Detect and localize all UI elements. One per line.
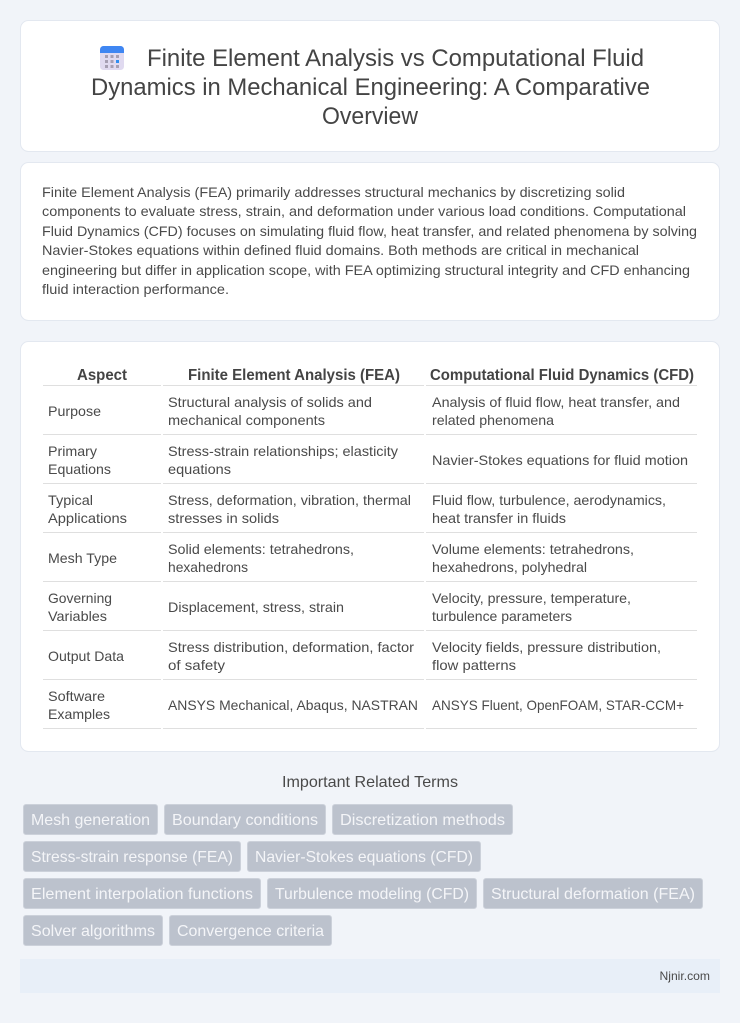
tags: related terms: Navier-Stokes equations (CFD) xyxy=(255,849,473,866)
row: software examples xyxy=(48,688,684,722)
row: typical applications: Fluid flow, turbulence, aerodynamics, xyxy=(432,492,666,508)
row: governing variables xyxy=(48,590,631,624)
row: mesh type xyxy=(48,541,634,575)
row: software examples: ANSYS Mechanical, Abaqus, NASTRAN xyxy=(168,697,418,713)
tags: related terms xyxy=(24,804,702,946)
tags: related terms: Mesh generation xyxy=(31,812,150,829)
row: mesh type: hexahedrons xyxy=(168,559,248,575)
row: primary equations: Equations xyxy=(48,461,111,477)
row: typical applications: stresses in solids xyxy=(168,510,279,526)
row: typical applications: Typical xyxy=(48,492,93,508)
intro text: Finite Element Analysis (FEA) primarily addresses structural mechanics by discretizing solid xyxy=(42,184,625,200)
row: primary equations: equations xyxy=(168,461,231,477)
intro text: Navier-Stokes equations within defined fluid domains. Both methods are critical in mechanical xyxy=(42,242,639,258)
row: governing variables: Governing xyxy=(48,590,112,606)
tags: related terms: Structural deformation (FEA) xyxy=(491,886,695,903)
row: governing variables: Displacement, stress, strain xyxy=(168,599,344,615)
row: output data: Stress distribution, deformation, factor xyxy=(168,639,414,655)
intro text xyxy=(42,184,697,297)
tags: related terms: Turbulence modeling (CFD) xyxy=(275,886,469,903)
row: purpose xyxy=(48,394,680,428)
row: mesh type: hexahedrons, polyhedral xyxy=(432,559,587,575)
title xyxy=(91,45,650,130)
row: output data: Velocity fields, pressure distribution, xyxy=(432,639,661,655)
row: purpose: Purpose xyxy=(48,403,101,419)
title: Finite Element Analysis vs Computational Fluid xyxy=(147,45,644,72)
row: governing variables: Velocity, pressure, temperature, xyxy=(432,590,631,606)
row: primary equations: Primary xyxy=(48,443,97,459)
panel: comparison table xyxy=(20,342,720,752)
row: output data: Output Data xyxy=(48,648,124,664)
row: software examples: Software xyxy=(48,688,105,704)
table header: Computational Fluid Dynamics (CFD) xyxy=(430,367,694,384)
row: purpose: Structural analysis of solids and xyxy=(168,394,372,410)
row: governing variables: turbulence parameters xyxy=(432,608,572,624)
row: output data: flow patterns xyxy=(432,657,516,673)
table header xyxy=(77,367,694,384)
row: typical applications xyxy=(48,492,666,526)
table header: Aspect xyxy=(77,367,128,384)
footer xyxy=(20,959,720,993)
panel: intro xyxy=(20,162,720,320)
row: mesh type: Mesh Type xyxy=(48,550,117,566)
icon: calendar grid xyxy=(100,46,124,70)
row: purpose: mechanical components xyxy=(168,412,325,428)
intro text: fluid interaction performance. xyxy=(42,281,229,297)
panel: title card xyxy=(20,20,720,152)
row: typical applications: Applications xyxy=(48,510,127,526)
footer: Njnir.com xyxy=(660,969,710,983)
row: governing variables: Variables xyxy=(48,608,107,624)
tags: related terms: Element interpolation functions xyxy=(31,886,253,903)
tags: related terms: Discretization methods xyxy=(340,812,505,829)
row: typical applications: heat transfer in fluids xyxy=(432,510,566,526)
heading: related terms: Important Related Terms xyxy=(282,774,458,791)
row: output data: of safety xyxy=(168,657,225,673)
row: primary equations: Navier-Stokes equations for fluid motion xyxy=(432,452,688,468)
row: purpose: related phenomena xyxy=(432,412,554,428)
row: typical applications: Stress, deformation, vibration, thermal xyxy=(168,492,411,508)
row: software examples: ANSYS Fluent, OpenFOAM, STAR-CCM+ xyxy=(432,697,684,713)
tags: related terms: Boundary conditions xyxy=(172,812,318,829)
intro text: engineering but differ in application scope, with FEA optimizing structural integrity and CFD enhancing xyxy=(42,262,690,278)
row: mesh type: Volume elements: tetrahedrons, xyxy=(432,541,634,557)
row: primary equations xyxy=(48,443,688,477)
table header: Finite Element Analysis (FEA) xyxy=(188,367,400,384)
row: primary equations: Stress-strain relationships; elasticity xyxy=(168,443,398,459)
row: output data xyxy=(48,639,661,673)
tags: related terms: Solver algorithms xyxy=(31,923,155,940)
row: mesh type: Solid elements: tetrahedrons, xyxy=(168,541,354,557)
tags: related terms: Convergence criteria xyxy=(177,923,324,940)
tags: related terms: Stress-strain response (FEA) xyxy=(31,849,233,866)
title: Dynamics in Mechanical Engineering: A Comparative xyxy=(91,74,650,101)
row: software examples: Examples xyxy=(48,706,110,722)
title: Overview xyxy=(322,103,419,130)
intro text: components to evaluate stress, strain, and deformation under various load conditions. Computational xyxy=(42,203,686,219)
intro text: Fluid Dynamics (CFD) focuses on simulating fluid flow, heat transfer, and related phenomena by solving xyxy=(42,223,697,239)
row: purpose: Analysis of fluid flow, heat transfer, and xyxy=(432,394,680,410)
